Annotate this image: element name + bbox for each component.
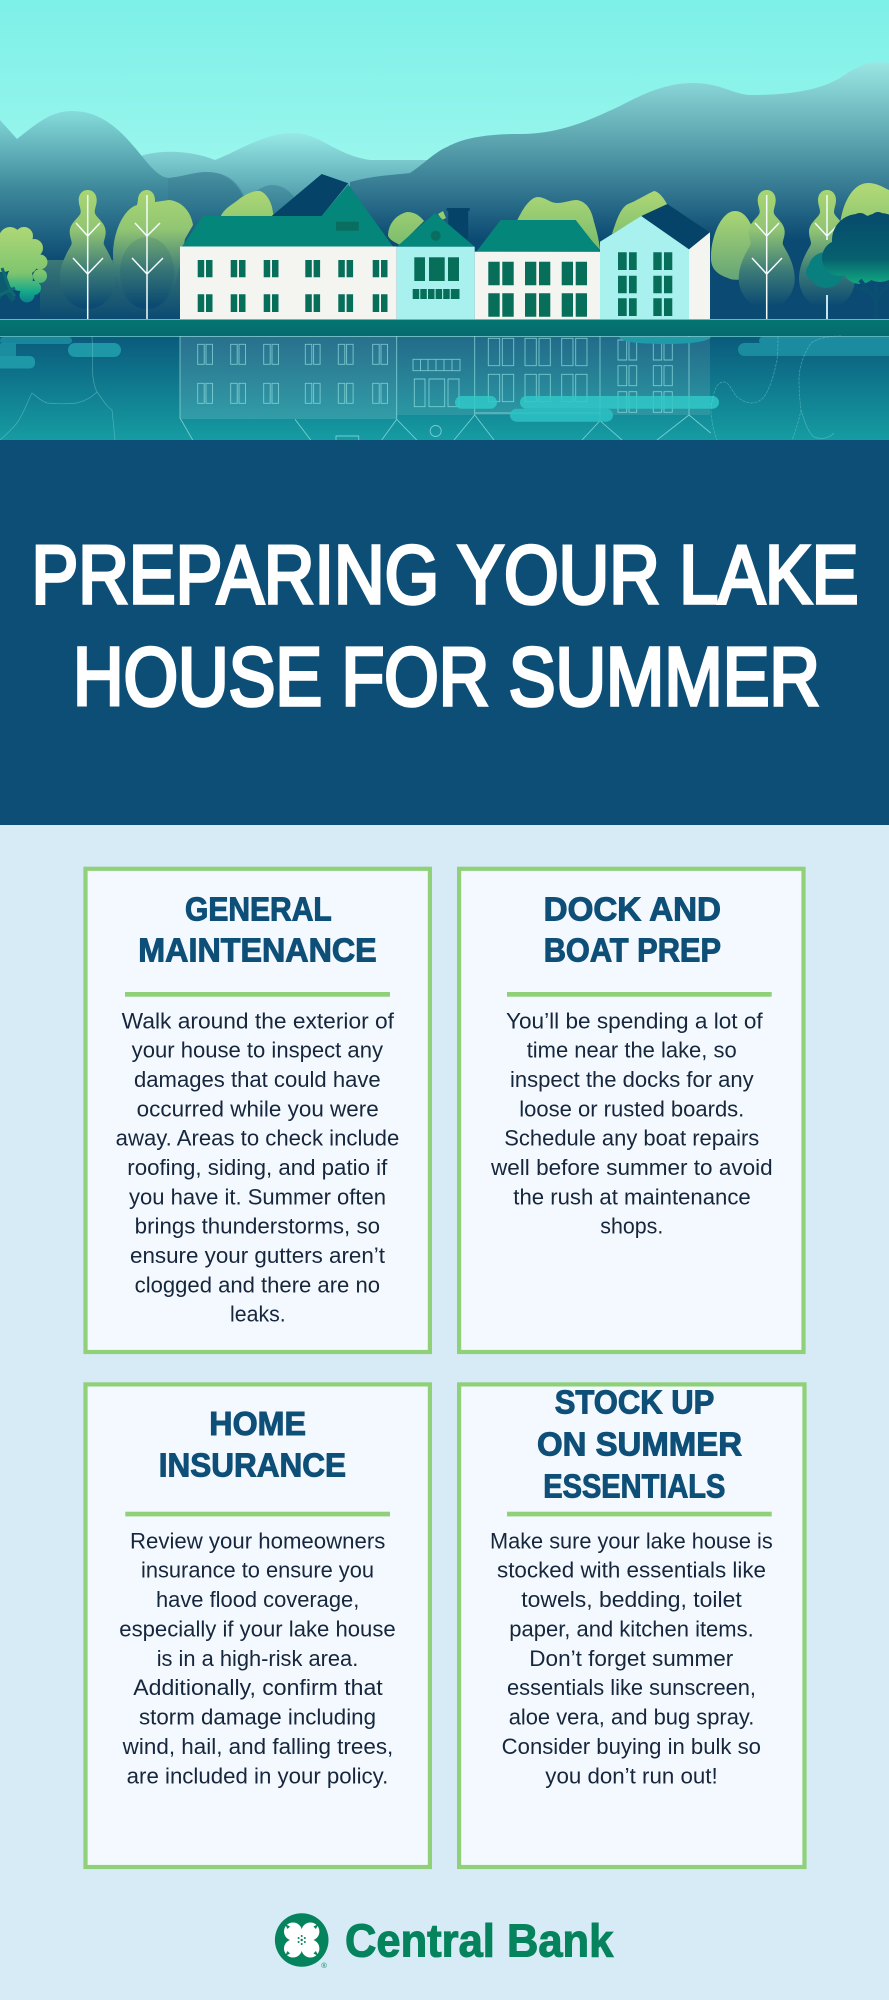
title [32,528,858,723]
body text: leaks. [230,1302,286,1327]
heading: GENERAL [185,891,332,928]
side wall [689,232,710,319]
body text: are included in your policy. [127,1763,388,1788]
icon: dogwood flower in circle [275,1913,329,1967]
logo: Central Bank: Central Bank [345,1915,614,1967]
chimney [447,208,470,239]
body text: ensure your gutters aren’t [130,1243,385,1268]
heading: BOAT PREP [544,932,721,969]
body text: away. Areas to check include [116,1126,399,1151]
body text: time near the lake, so [527,1038,737,1063]
heading [544,891,721,969]
body text: shops. [600,1214,663,1239]
body text: Schedule any boat repairs [504,1126,759,1151]
far hills [142,133,427,216]
body text [119,1528,396,1788]
heading: DOCK AND [544,891,721,928]
roof [182,184,393,246]
windows [618,252,672,316]
house 4 [600,204,710,319]
wall [180,246,397,319]
heading: ESSENTIALS [543,1468,725,1505]
ground shrubs behind trees [40,260,190,320]
wall [475,252,600,319]
heading [159,1405,346,1483]
sky [0,0,889,170]
windows [488,262,587,317]
body text: your house to inspect any [132,1038,383,1063]
birch tree 2 with wide crown [113,190,193,319]
body text: insurance to ensure you [141,1558,374,1583]
body text: loose or rusted boards. [519,1096,744,1121]
body text: paper, and kitchen items. [509,1616,754,1641]
body text [490,1008,773,1239]
panel: general maintenance [86,869,430,1352]
heading: INSURANCE [159,1446,346,1483]
building reflections in the water [180,336,711,440]
roof dark section [272,174,348,216]
body text: well before summer to avoid [490,1155,773,1180]
house 3 [475,220,600,319]
left mountain [0,111,248,330]
heading: HOME [209,1405,306,1442]
illustration: lake houses scene [0,0,889,440]
body text: inspect the docks for any [510,1067,754,1092]
body text: Make sure your lake house is [490,1528,773,1553]
panel: dock and boat prep [459,869,804,1352]
body text: brings thunderstorms, so [135,1214,380,1239]
body text: towels, bedding, toilet [521,1587,742,1612]
body text [116,1008,399,1327]
heading [537,1384,742,1505]
dark roof [641,204,710,249]
birch tree 4 [799,190,855,319]
big right mountain [350,62,889,330]
heading [138,891,377,969]
trunk [0,272,16,302]
middle hills [170,172,294,214]
body text: Review your homeowners [130,1528,385,1553]
body text: essentials like sunscreen, [507,1675,756,1700]
left lobed tree [0,227,48,302]
body text: especially if your lake house [119,1616,396,1641]
body text: clogged and there are no [135,1272,380,1297]
heading: STOCK UP [555,1384,714,1421]
windows [198,260,388,312]
lake water [0,336,889,440]
water patches [0,337,889,422]
logo: Central Bank: ® [321,1961,327,1970]
body text: have flood coverage, [156,1587,359,1612]
birch tree 3 [739,190,795,319]
body text: you have it. Summer often [129,1184,386,1209]
body text: the rush at maintenance [513,1184,751,1209]
body text: occurred while you were [137,1096,379,1121]
body text: storm damage including [139,1705,376,1730]
top right bush [840,183,889,221]
body text: you don’t run out! [545,1763,718,1788]
wall [397,247,475,319]
body text: roofing, siding, and patio if [127,1155,388,1180]
right side bush [711,211,755,280]
panel: home insurance [86,1384,430,1867]
logo: Central Bank [275,1913,614,1970]
roof [397,213,475,247]
body text: is in a high-risk area. [157,1646,358,1671]
panel: stock up on summer essentials [459,1384,804,1867]
heading: MAINTENANCE [138,932,377,969]
bushes behind the houses [220,191,668,250]
body text [490,1528,773,1788]
dark round tree [806,212,889,288]
body text: Consider buying in bulk so [502,1734,761,1759]
body text: aloe vera, and bug spray. [509,1705,754,1730]
body text: Walk around the exterior of [122,1008,395,1033]
windows [413,257,460,299]
roof [476,220,600,252]
gable wall [600,216,689,319]
shoreline ground strip [0,319,889,336]
faint tree reflection outlines [0,336,841,440]
body text: Additionally, confirm that [133,1675,383,1700]
birch tree 1 [60,190,116,319]
heading: ON SUMMER [537,1426,742,1463]
title banner [0,440,889,825]
body text: Don’t forget summer [529,1646,733,1671]
house 2 [397,208,475,319]
body text: damages that could have [134,1067,381,1092]
house 1 [180,174,397,319]
body text: wind, hail, and falling trees, [122,1734,393,1759]
body text: stocked with essentials like [497,1558,766,1583]
body text: You’ll be spending a lot of [506,1008,764,1033]
